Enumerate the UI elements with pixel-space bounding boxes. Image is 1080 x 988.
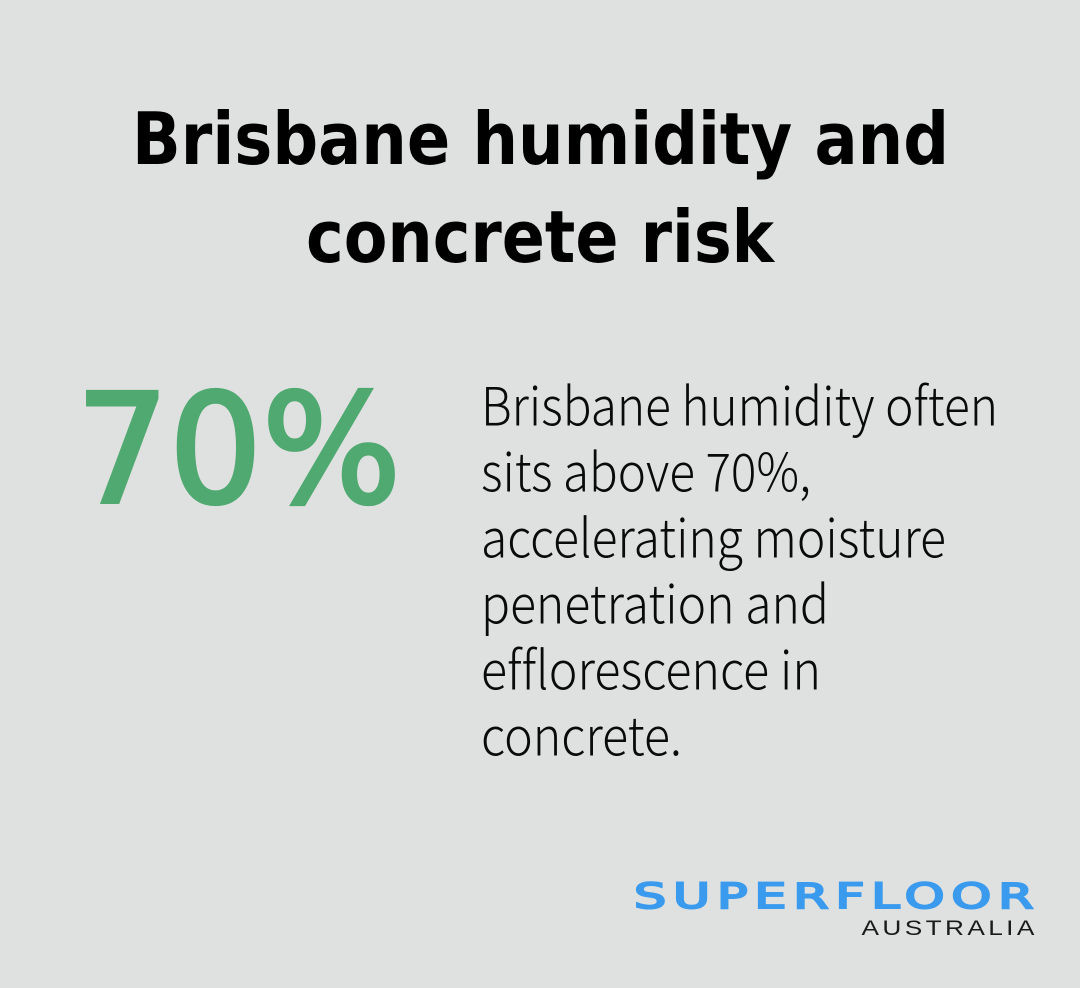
description text: penetration and xyxy=(481,564,829,640)
title: Brisbane humidity and xyxy=(132,97,949,181)
description text: efflorescence in xyxy=(481,630,821,706)
description text xyxy=(481,366,998,772)
logo: Superfloor Australia: AUSTRALIA xyxy=(862,916,1038,940)
description text: Brisbane humidity often xyxy=(481,366,998,442)
logo: Superfloor Australia: SUPERFLOOR xyxy=(634,877,1040,917)
description text: accelerating moisture xyxy=(481,498,946,574)
logo: Superfloor Australia xyxy=(634,877,1040,940)
description text: concrete. xyxy=(481,696,682,772)
description text: sits above 70%, xyxy=(481,432,811,508)
title xyxy=(132,97,949,279)
big stat: 70%: 70% xyxy=(76,362,401,538)
title: concrete risk xyxy=(306,195,776,279)
